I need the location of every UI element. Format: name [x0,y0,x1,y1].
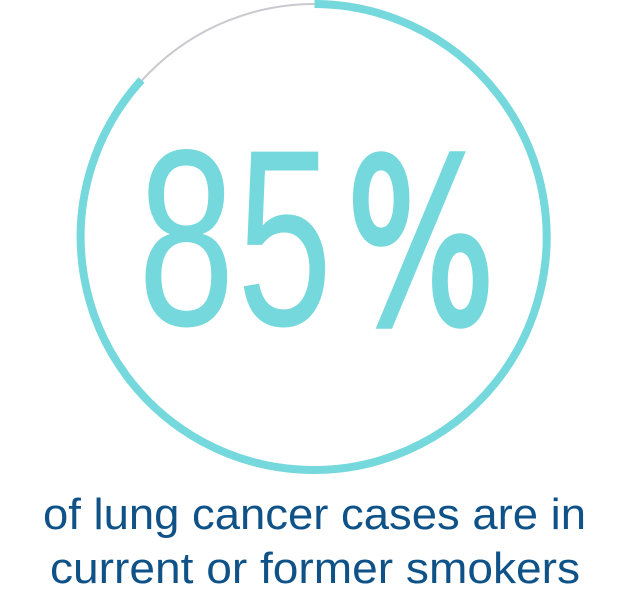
caption line 1: of lung cancer cases are in [43,490,586,539]
caption [43,490,586,593]
digit 5: 5 [237,97,332,379]
progress ring [81,4,548,470]
digit 8: 8 [138,97,235,379]
big number: 85% [138,97,495,379]
caption line 2: current or former smokers [50,544,580,593]
ring track [82,4,548,470]
ring progress arc: 85% [81,4,547,470]
percent sign: % [346,112,495,378]
